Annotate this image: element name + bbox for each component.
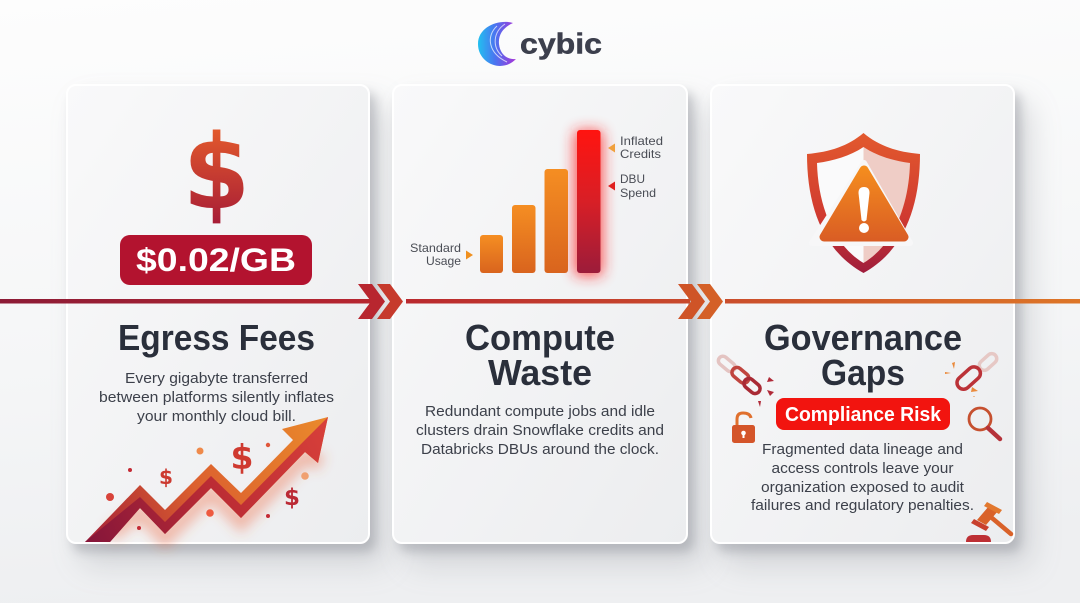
logo: cybic [478, 22, 602, 66]
body text: clusters drain Snowflake credits and [416, 422, 664, 439]
label: dbu spend: DBU [620, 172, 645, 186]
label: standard usage: Standard [410, 241, 461, 255]
price badge: $0.02/GB [136, 242, 296, 278]
icon: open padlock [732, 413, 755, 443]
price badge [120, 235, 312, 285]
label: dbu spend [608, 172, 656, 200]
icon: broken chain left [717, 354, 774, 407]
timeline arrow with chevrons [0, 284, 1080, 319]
label: inflated credits: Inflated [620, 134, 663, 148]
icon: shield with warning [807, 133, 920, 273]
icon: dollar sign: $ [183, 113, 250, 233]
heading: Waste [488, 352, 592, 393]
heading: Egress Fees [118, 317, 315, 358]
body text: Every gigabyte transferred [125, 370, 308, 387]
icon: gavel [966, 502, 1011, 542]
chart: rising arrow with dollars: $ [284, 485, 300, 511]
heading: Compute [465, 317, 615, 358]
heading [465, 317, 615, 393]
label: inflated credits [608, 134, 663, 161]
body text [751, 441, 974, 514]
body text: your monthly cloud bill. [137, 408, 296, 425]
heading: Governance [764, 317, 962, 358]
heading [764, 317, 962, 393]
chart: rising arrow with dollars: $ [230, 438, 254, 478]
body text [99, 370, 334, 425]
icon: magnifier [969, 408, 1000, 439]
chevron pair 1 [358, 284, 403, 319]
label: standard usage: Usage [426, 254, 461, 268]
badge: compliance risk: Compliance Risk [785, 404, 942, 426]
body text: Databricks DBUs around the clock. [421, 441, 659, 458]
wordmark: cybic [520, 28, 602, 60]
panel: governance gaps [711, 85, 1014, 543]
chart: rising arrow with dollars: $ [159, 465, 173, 489]
label: inflated credits: Credits [620, 147, 661, 161]
body text: access controls leave your [772, 460, 954, 477]
panel: egress fees [67, 85, 369, 543]
chevron pair 2 [678, 284, 723, 319]
body text: Redundant compute jobs and idle [425, 403, 655, 420]
icon: broken chain right [945, 352, 999, 397]
body text: between platforms silently inflates [99, 389, 334, 406]
body text: organization exposed to audit [761, 479, 965, 496]
heading: Gaps [821, 352, 905, 393]
badge: compliance risk [776, 398, 950, 430]
chart: rising arrow with dollars [85, 417, 328, 542]
body text [416, 403, 664, 458]
label: dbu spend: Spend [620, 186, 656, 200]
icon: crescent [478, 22, 516, 66]
panel: compute waste [393, 85, 687, 543]
label: standard usage [410, 241, 473, 268]
body text: Fragmented data lineage and [762, 441, 963, 458]
bar chart: rising compute usage [410, 130, 663, 276]
body text: failures and regulatory penalties. [751, 497, 974, 514]
